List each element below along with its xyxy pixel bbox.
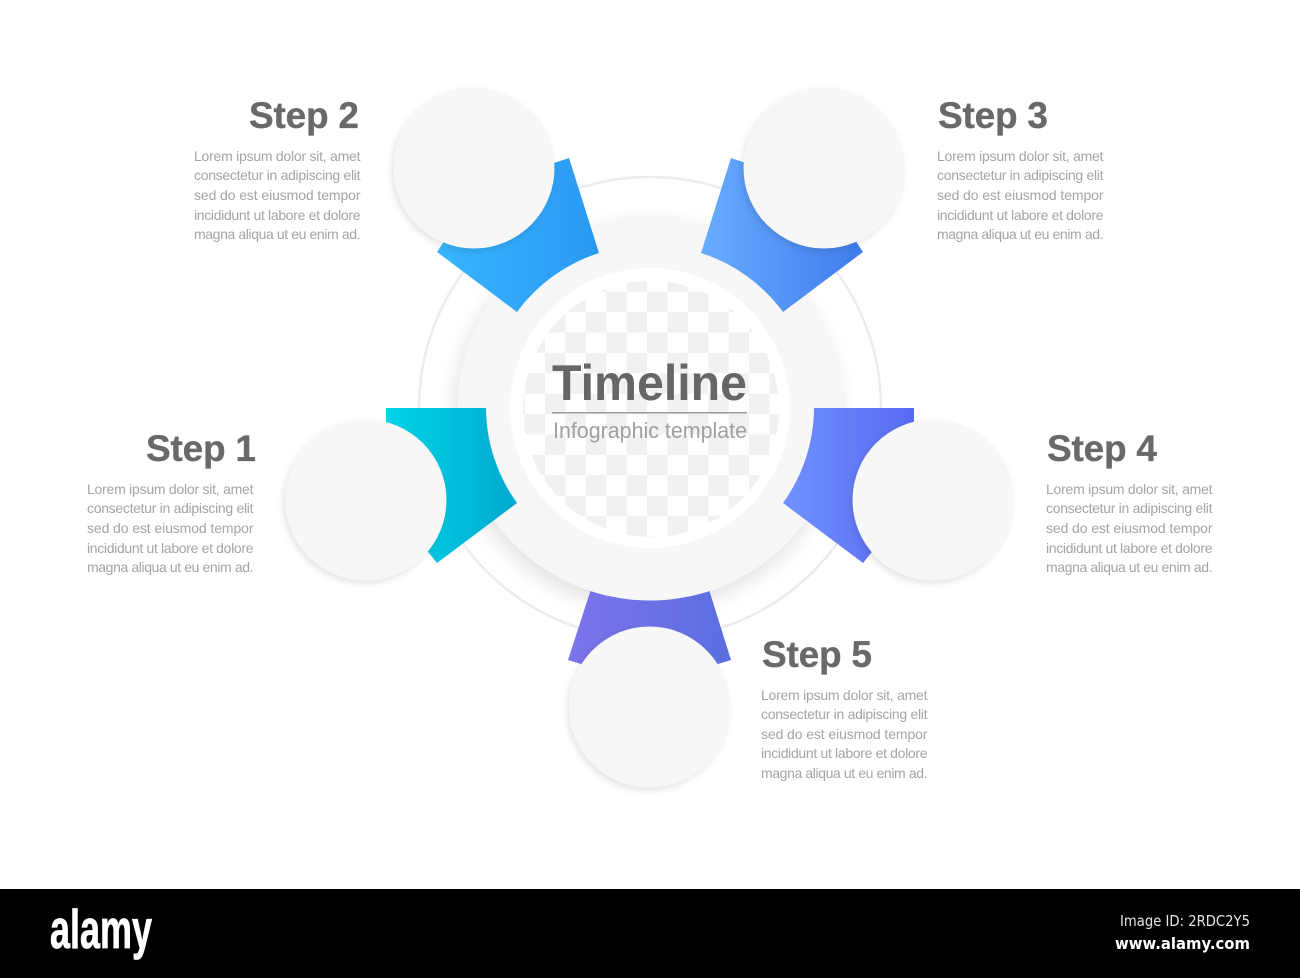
- center disc: [458, 216, 842, 600]
- body: step 4: [1046, 481, 1213, 575]
- text block: step 3: [937, 95, 1104, 242]
- body: step 2: sed do est eiusmod tempor: [194, 187, 361, 203]
- text block: step 4: [1046, 428, 1213, 575]
- body: step 1: [87, 481, 254, 575]
- body: step 1: Lorem ipsum dolor sit, amet: [87, 481, 254, 497]
- body: step 5: incididunt ut labore et dolore: [761, 745, 928, 761]
- body: step 3: consectetur in adipiscing elit: [937, 167, 1104, 183]
- text block: step 5: [761, 634, 928, 781]
- footer url: www.alamy.com: [1115, 934, 1250, 953]
- text block: step 1: [87, 428, 256, 575]
- body: step 5: [761, 687, 928, 781]
- body: step 3: incididunt ut labore et dolore: [937, 207, 1104, 223]
- inner white circle: [510, 268, 790, 548]
- text block: step 2: [194, 95, 361, 242]
- body: step 1: sed do est eiusmod tempor: [87, 520, 254, 536]
- body: step 2: consectetur in adipiscing elit: [194, 167, 361, 183]
- title rule: [552, 412, 747, 414]
- icon circle: step 4: [852, 420, 1014, 580]
- body: step 5: sed do est eiusmod tempor: [761, 726, 928, 742]
- footer bar: [0, 889, 1300, 978]
- heading: step 5: Step 5: [762, 634, 872, 675]
- body: step 4: magna aliqua ut eu enim ad.: [1046, 559, 1212, 575]
- body: step 4: Lorem ipsum dolor sit, amet: [1046, 481, 1213, 497]
- body: step 4: sed do est eiusmod tempor: [1046, 520, 1213, 536]
- icon circle: step 1: [286, 420, 446, 580]
- footer logo: alamy: [50, 898, 152, 960]
- icon circle: step 2: [394, 88, 554, 248]
- arrow: step 1 connector: [366, 408, 517, 563]
- body: step 3: [937, 148, 1104, 242]
- arrow: step 3 connector: [701, 158, 863, 312]
- heading: step 1: Step 1: [146, 428, 256, 469]
- body: step 3: Lorem ipsum dolor sit, amet: [937, 148, 1104, 164]
- arrow: step 4 connector: [783, 408, 934, 563]
- body: step 2: magna aliqua ut eu enim ad.: [194, 226, 360, 242]
- arrow: step 5 connector: [568, 580, 731, 700]
- body: step 4: incididunt ut labore et dolore: [1046, 540, 1213, 556]
- heading: step 2: Step 2: [249, 95, 359, 136]
- body: step 2: Lorem ipsum dolor sit, amet: [194, 148, 361, 164]
- body: step 2: incididunt ut labore et dolore: [194, 207, 361, 223]
- body: step 2: [194, 148, 361, 242]
- image placeholder checkerboard: [523, 281, 779, 537]
- body: step 3: magna aliqua ut eu enim ad.: [937, 226, 1104, 242]
- heading: step 4: Step 4: [1047, 428, 1157, 469]
- body: step 1: incididunt ut labore et dolore: [87, 540, 254, 556]
- body: step 5: Lorem ipsum dolor sit, amet: [761, 687, 928, 703]
- icon circle: step 5: [569, 626, 730, 788]
- body: step 5: magna aliqua ut eu enim ad.: [761, 765, 928, 781]
- body: step 1: magna aliqua ut eu enim ad.: [87, 559, 254, 575]
- subtitle: Infographic template: [553, 418, 747, 443]
- body: step 1: consectetur in adipiscing elit: [87, 500, 254, 516]
- title: Timeline: [552, 355, 747, 411]
- icon circle: step 3: [744, 88, 904, 248]
- body: step 4: consectetur in adipiscing elit: [1046, 500, 1213, 516]
- heading: step 3: Step 3: [938, 95, 1048, 136]
- outer ring: [419, 177, 881, 639]
- center title block: [552, 355, 747, 443]
- body: step 5: consectetur in adipiscing elit: [761, 706, 928, 722]
- center disc shadow: [458, 216, 842, 600]
- arrow: step 2 connector: [437, 158, 599, 312]
- body: step 3: sed do est eiusmod tempor: [937, 187, 1104, 203]
- image id: Image ID: 2RDC2Y5: [1120, 912, 1250, 930]
